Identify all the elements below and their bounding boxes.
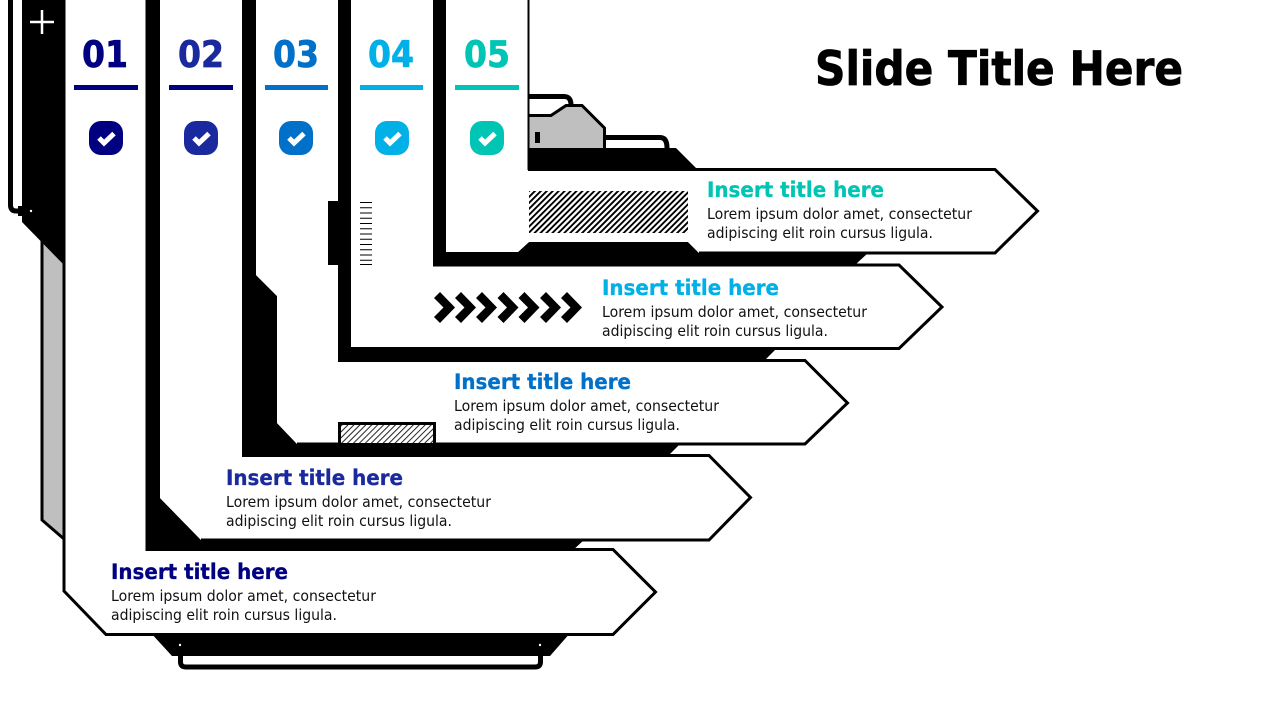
panel 03 (242, 0, 848, 456)
text 05: Lorem ipsum dolor amet, consectetur (707, 205, 973, 223)
arrow shape 01 (64, 0, 656, 634)
text 05: adipiscing elit roin cursus ligula. (707, 224, 933, 242)
bottom machinery: black base and pipe (150, 632, 571, 667)
text 01: Lorem ipsum dolor amet, consectetur (111, 587, 377, 605)
text 01 (111, 560, 377, 624)
number 03: 03 (273, 33, 319, 76)
panel 01 (64, 0, 656, 634)
text 04: adipiscing elit roin cursus ligula. (602, 322, 828, 340)
number 05: 05 (464, 33, 510, 76)
column header 01 (74, 33, 138, 155)
number 01: 01 (82, 33, 128, 76)
text 03: Lorem ipsum dolor amet, consectetur (454, 397, 720, 415)
text 01: Insert title here (111, 560, 288, 585)
text 03: adipiscing elit roin cursus ligula. (454, 416, 680, 434)
column header 05 (455, 33, 519, 155)
text 03: Insert title here (454, 370, 631, 395)
text 03 (454, 370, 720, 434)
panel 05 (433, 0, 1038, 265)
icon: check 04 (375, 121, 409, 155)
machine on top of panel 05 (528, 96, 697, 169)
column header 04 (360, 33, 423, 155)
text 02: adipiscing elit roin cursus ligula. (226, 512, 452, 530)
text 04: Lorem ipsum dolor amet, consectetur (602, 303, 868, 321)
frame 02 (147, 0, 584, 551)
arrow shape 04 (351, 0, 942, 348)
text 02: Insert title here (226, 466, 403, 491)
left machinery: black column, pipe and grey plate (10, 0, 64, 539)
icon: check 02 (184, 121, 218, 155)
text 04 (602, 276, 868, 340)
text 04: Insert title here (602, 276, 779, 301)
underline 05 (455, 85, 519, 90)
text 01: adipiscing elit roin cursus ligula. (111, 606, 337, 624)
icon: check 03 (279, 121, 313, 155)
icon: check 01 (89, 121, 123, 155)
hatched block (340, 424, 434, 444)
underline 03 (265, 85, 328, 90)
panel 02 (147, 0, 750, 551)
frame 04 (338, 0, 776, 361)
title: Slide Title Here (815, 42, 1183, 97)
text 02: Lorem ipsum dolor amet, consectetur (226, 493, 492, 511)
icon: check 05 (470, 121, 504, 155)
number 02: 02 (178, 33, 224, 76)
text 05: Insert title here (707, 178, 884, 203)
side tab (328, 201, 339, 265)
underline 01 (74, 85, 138, 90)
underline 04 (360, 85, 423, 90)
arrow shape 02 (160, 0, 750, 540)
panel 04 (328, 0, 942, 361)
column header 02 (169, 33, 233, 155)
arrow shape 03 (256, 0, 848, 444)
hatched strip (529, 191, 688, 233)
frame 03 (242, 0, 680, 456)
arrow shape 05 (446, 0, 1038, 253)
frame 05 (433, 0, 868, 265)
chevrons (434, 292, 582, 323)
column header 03 (265, 33, 328, 155)
number 04: 04 (368, 33, 414, 76)
tick marks (360, 202, 372, 264)
text 05 (707, 178, 973, 242)
text 02 (226, 466, 492, 530)
underline 02 (169, 85, 233, 90)
